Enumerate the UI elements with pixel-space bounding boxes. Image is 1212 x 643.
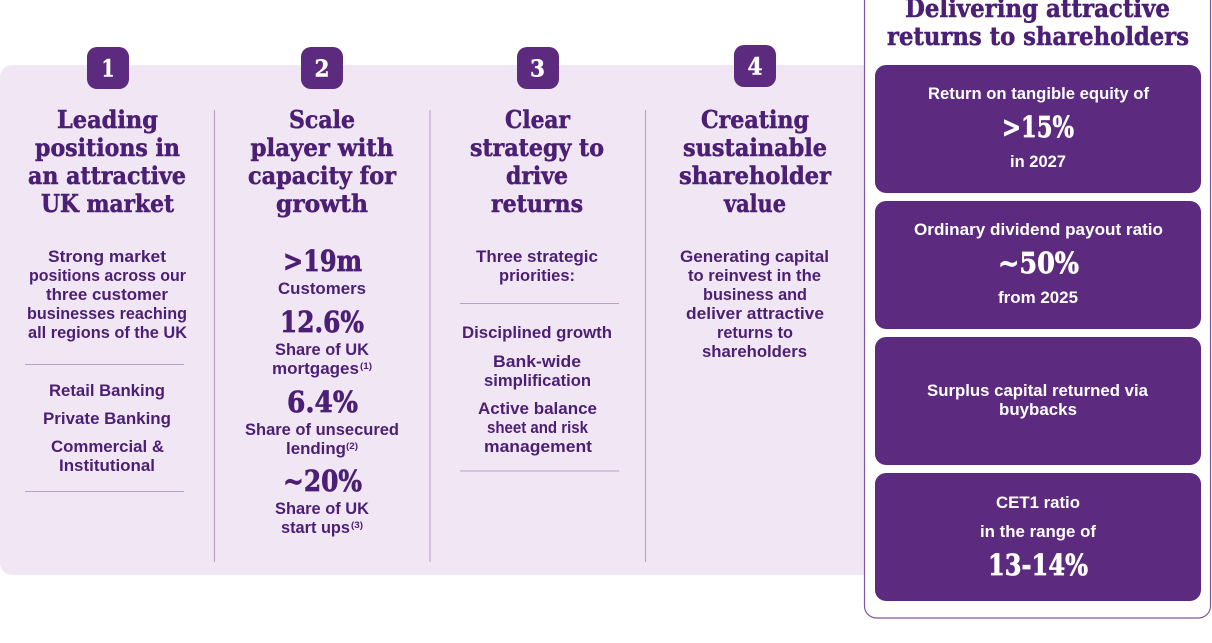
stat: start ups: start ups xyxy=(281,518,350,537)
text block: generating capital: to reinvest in the xyxy=(688,266,821,285)
column 4: shareholder value xyxy=(679,45,832,361)
text block: strategic priorities: sheet and risk xyxy=(487,418,588,437)
text block: strategic priorities: simplification xyxy=(484,371,591,390)
stat: unsecured lending xyxy=(245,385,399,458)
card: surplus capital: Surplus capital returned via xyxy=(927,381,1149,400)
card: CET1 ratio: 13-14% xyxy=(988,548,1088,582)
stat: UK mortgages: Share of UK xyxy=(275,340,370,359)
text block: generating capital: Generating capital xyxy=(680,247,829,266)
text block: strategic priorities intro: Three strategic xyxy=(476,247,598,266)
text block: customer businesses: Retail Banking xyxy=(49,381,165,400)
card: ordinary dividend: from 2025 xyxy=(998,288,1078,307)
badge 3: 3 xyxy=(530,56,545,82)
stat: unsecured lending: Share of unsecured xyxy=(245,420,399,439)
text block: market positions xyxy=(27,247,188,342)
column 2: scale player xyxy=(245,47,399,537)
card: return on tangible equity xyxy=(875,65,1201,193)
text block: customer businesses: Commercial & xyxy=(51,437,164,456)
panel: delivering attractive returns xyxy=(864,0,1210,618)
stat: start ups: (3) xyxy=(351,520,363,530)
stat: UK mortgages: (1) xyxy=(360,361,372,371)
stat: unsecured lending: 6.4% xyxy=(287,385,358,419)
heading 4: sustainable xyxy=(683,133,827,162)
text block: market positions: all regions of the UK xyxy=(28,323,188,342)
text block: strategic priorities xyxy=(462,323,612,456)
card: ordinary dividend: ~50% xyxy=(998,246,1079,280)
text block: customer businesses: Institutional xyxy=(59,456,155,475)
stat: customers: >19m xyxy=(283,244,362,278)
text block: generating capital: business and xyxy=(703,285,807,304)
badge 3 xyxy=(517,47,559,89)
stat: UK mortgages: mortgages xyxy=(272,359,359,378)
badge 1: 1 xyxy=(102,56,114,82)
heading 3: Clear xyxy=(505,105,571,134)
text block: market positions: businesses reaching xyxy=(27,304,187,323)
text block: strategic priorities: Disciplined growth xyxy=(462,323,612,342)
card: return on tangible equity: in 2027 xyxy=(1010,152,1066,171)
column 3: clear strategy xyxy=(462,47,612,456)
text block: market positions: Strong market xyxy=(48,247,166,266)
heading 4: value xyxy=(723,189,786,218)
badge 4: 4 xyxy=(748,54,762,80)
card: CET1 ratio: in the range of xyxy=(980,522,1096,541)
text block: market positions: positions across our xyxy=(29,266,186,285)
heading 3: strategy to xyxy=(470,133,604,162)
heading 2: Scale xyxy=(289,105,355,134)
text block: strategic priorities: management xyxy=(484,437,592,456)
text block: strategic priorities intro: priorities: xyxy=(499,266,575,285)
heading 4: Creating xyxy=(701,105,809,134)
stat: start ups: ~20% xyxy=(283,464,362,498)
card: CET1 ratio: CET1 ratio xyxy=(996,493,1080,512)
heading 2 xyxy=(248,105,397,218)
card: ordinary dividend: Ordinary dividend payout ratio xyxy=(914,220,1163,239)
panel: background of four pillars xyxy=(0,65,866,575)
text block: customer businesses: Private Banking xyxy=(43,409,171,428)
heading 3: drive xyxy=(506,161,568,190)
heading 1: UK market xyxy=(41,189,175,218)
text block: customer businesses xyxy=(43,381,171,475)
heading 2: capacity for xyxy=(248,161,397,190)
heading 2: player with xyxy=(250,133,394,162)
badge 2: 2 xyxy=(314,56,330,82)
column 1: leading positions xyxy=(27,47,188,475)
stat: UK mortgages: 12.6% xyxy=(280,305,364,339)
title xyxy=(887,0,1189,51)
heading 3 xyxy=(470,105,604,218)
heading 1 xyxy=(28,105,186,218)
card: surplus capital: buybacks xyxy=(999,400,1077,419)
badge 1 xyxy=(87,47,129,89)
stat: start ups xyxy=(275,464,370,537)
stat: UK mortgages xyxy=(272,305,372,378)
heading 4: shareholder xyxy=(679,161,832,190)
card: surplus capital xyxy=(875,337,1201,465)
text block: strategic priorities: Bank-wide xyxy=(493,352,581,371)
heading 2: growth xyxy=(276,189,368,218)
card: CET1 ratio xyxy=(875,473,1201,601)
heading 1: an attractive xyxy=(28,161,186,190)
card: return on tangible equity: >15% xyxy=(1002,110,1074,144)
heading 3: returns xyxy=(491,189,583,218)
stat: start ups: Share of UK xyxy=(275,499,370,518)
stat: unsecured lending: (2) xyxy=(346,441,358,451)
stat: unsecured lending: lending xyxy=(286,439,346,458)
badge 4 xyxy=(734,45,776,87)
stat: customers xyxy=(278,244,366,298)
card: ordinary dividend xyxy=(875,201,1201,329)
heading 1: positions in xyxy=(35,133,180,162)
heading 4 xyxy=(679,105,832,218)
text block: strategic priorities: Active balance xyxy=(478,399,597,418)
text block: generating capital xyxy=(680,247,829,361)
text block: generating capital: deliver attractive xyxy=(686,304,824,323)
text block: generating capital: shareholders xyxy=(702,342,807,361)
text block: strategic priorities intro xyxy=(476,247,598,285)
text block: market positions: three customer xyxy=(46,285,168,304)
stat: customers: Customers xyxy=(278,279,366,298)
text block: generating capital: returns to xyxy=(717,323,793,342)
title: returns to shareholders xyxy=(887,22,1189,51)
badge 2 xyxy=(301,47,343,89)
card: return on tangible equity: Return on tangible equity of xyxy=(928,84,1149,103)
heading 1: Leading xyxy=(57,105,158,134)
